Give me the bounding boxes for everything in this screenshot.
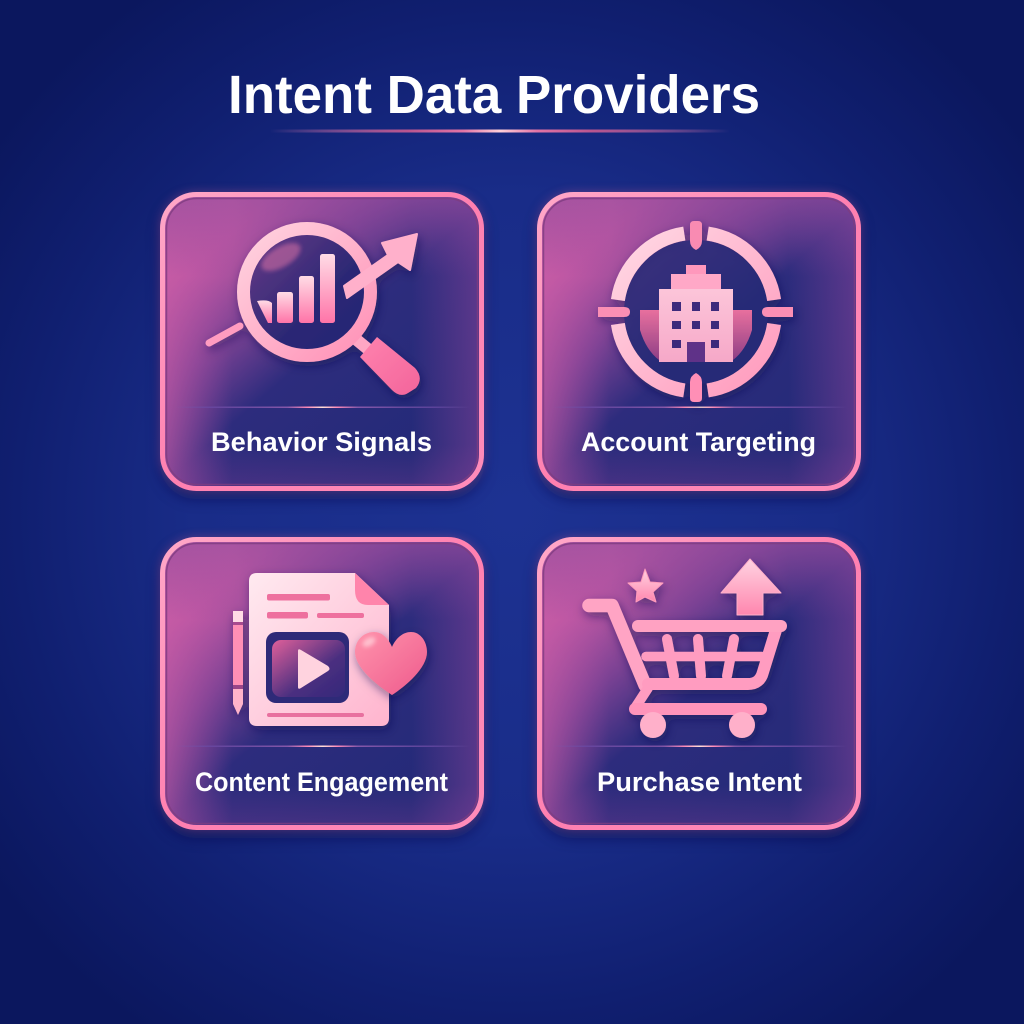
panel: Account Targeting xyxy=(537,192,861,499)
label: Purchase Intent xyxy=(597,767,802,797)
panel: Behavior Signals xyxy=(160,192,484,499)
icon: magnifier with bar chart and arrow xyxy=(209,228,420,395)
icon: document with video, heart and pencil xyxy=(233,573,427,726)
title: Intent Data Providers xyxy=(228,65,760,125)
panel: Content Engagement xyxy=(160,537,484,838)
label: Account Targeting xyxy=(581,427,816,457)
icon: shopping cart with star and up arrow xyxy=(589,559,787,738)
pencil xyxy=(233,611,243,715)
panel: Purchase Intent xyxy=(537,537,861,838)
up arrow xyxy=(721,559,781,615)
icon: target with building xyxy=(598,221,793,402)
title underline xyxy=(270,130,730,132)
star xyxy=(628,569,663,602)
label: Behavior Signals xyxy=(211,427,432,457)
label: Content Engagement xyxy=(195,767,448,797)
